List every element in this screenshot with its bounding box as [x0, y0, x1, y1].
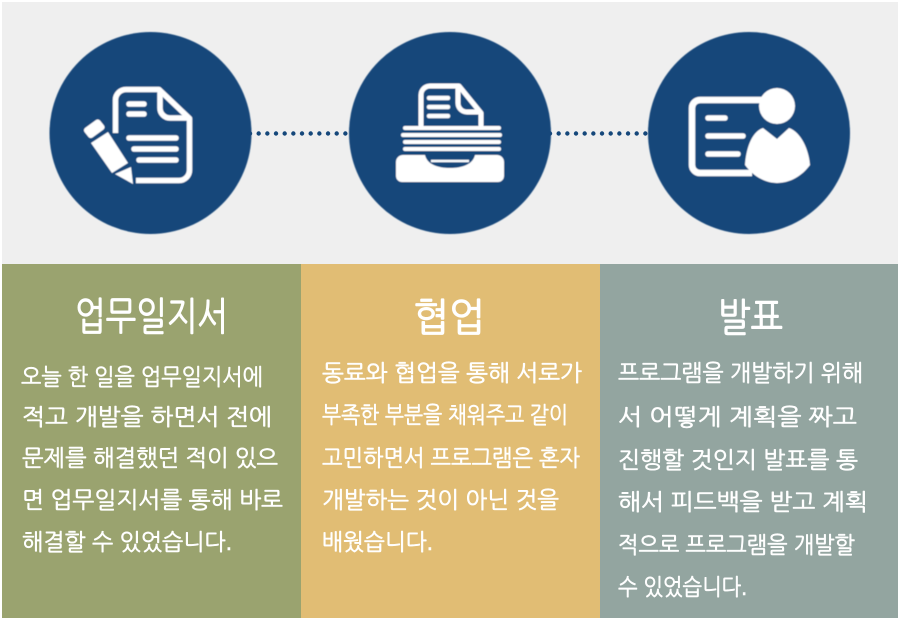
- heading: 발표: [718, 297, 783, 340]
- heading: 협업: [413, 297, 485, 340]
- body text: 프로그램을 개발하기 위해: [618, 360, 863, 386]
- body text: 고민하면서 프로그램은 혼자: [322, 445, 580, 471]
- icon: presenter with board: [648, 32, 850, 234]
- body text: 적으로 프로그램을 개발할: [618, 532, 855, 558]
- body text: 개발하는 것이 아닌 것을: [322, 487, 559, 513]
- body text: 문제를 해결했던 적이 있으: [22, 445, 278, 471]
- body text: 해서 피드백을 받고 계획: [618, 489, 868, 515]
- body text: 배웠습니다.: [322, 529, 433, 555]
- body text: 적고 개발을 하면서 전에: [22, 404, 272, 430]
- body text: 부족한 부분을 채워주고 같이: [322, 402, 568, 428]
- connector: first to second circle: [250, 131, 350, 136]
- icon: document in tray: [349, 32, 551, 234]
- body text: 수 있었습니다.: [618, 574, 747, 600]
- body text: 서 어떻게 계획을 짜고: [618, 404, 857, 430]
- body text: 면 업무일지서를 통해 바로: [22, 487, 283, 513]
- icon: document and pencil: [50, 32, 252, 234]
- panel: 업무일지서: [2, 264, 301, 618]
- panel: 협업: [301, 264, 600, 618]
- body text: 해결할 수 있었습니다.: [22, 529, 232, 555]
- panel: 발표: [600, 264, 898, 618]
- connector: second to third circle: [550, 131, 648, 136]
- top band background: [2, 2, 898, 264]
- body text: 오늘 한 일을 업무일지서에: [21, 364, 263, 390]
- body text: [21, 364, 283, 555]
- body text: 동료와 협업을 통해 서로가: [322, 360, 582, 386]
- body text: 진행할 것인지 발표를 통: [618, 447, 858, 473]
- heading: 업무일지서: [75, 296, 228, 339]
- body text: [322, 360, 582, 555]
- body text: [618, 360, 868, 600]
